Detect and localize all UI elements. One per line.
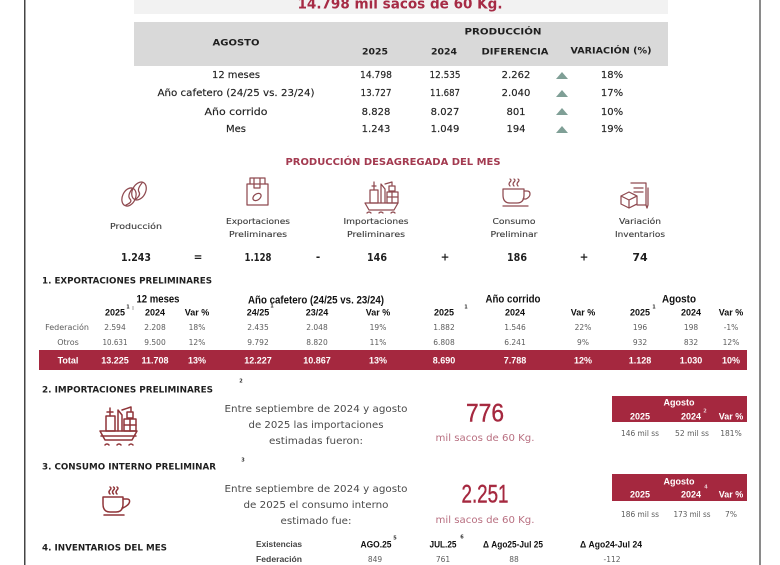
icon: coffee cup large [103,487,130,515]
callout: imports 776: 776 [466,400,504,428]
exports table: Var % [366,308,390,318]
consumption August table: 186 mil ss [621,510,659,519]
imports August table: 2025 [630,412,650,422]
breakdown equation: Variación [619,216,661,226]
production summary table: 801 [506,107,526,118]
breakdown equation: Exportaciones [226,217,290,226]
exports table: Año corrido [486,294,541,306]
exports table: Otros [57,338,79,347]
exports table: 12% [723,338,739,347]
exports table: 13.225 [101,356,129,366]
imports August table: 2024 [681,412,701,422]
production summary table: 2.040 [502,88,530,99]
exports table: 1 [464,305,468,311]
production summary table: 19% [601,124,623,135]
exports table: 8.820 [306,338,328,347]
breakdown equation: Consumo [492,217,536,226]
breakdown equation: Importaciones [344,217,408,226]
exports table: 7.788 [504,356,526,366]
breakdown equation: Inventarios [615,230,665,239]
production summary table: 194 [506,124,526,135]
exports table: 198 [684,323,698,332]
exports table: 1.128 [629,356,651,366]
exports table: 1 [270,304,274,310]
exports table: 1 [126,305,130,311]
heading: producción desagregada: PRODUCCIÓN DESAGREGADA DEL MES [286,156,501,168]
exports table: 2024 [145,308,165,318]
callout: consumption 2.251: 2.251 [462,481,508,509]
exports table: 2.435 [247,323,269,332]
exports table: Agosto [662,294,696,306]
consumption August table: 2025 [630,490,650,500]
exports table: Var % [185,308,209,318]
exports table: 22% [575,323,591,332]
inventory table [256,535,642,564]
exports table: 10% [722,356,740,366]
heading: exportaciones: 1. EXPORTACIONES PRELIMINARES [42,277,212,287]
production summary table: VARIACIÓN (%) [570,45,652,57]
exports table: 12% [574,356,592,366]
imports August table: 2 [703,409,707,415]
callout: imports 776 [436,400,534,444]
exports table: 10.867 [303,356,331,366]
exports table: 23/24 [306,308,328,318]
imports August table: 146 mil ss [621,429,659,438]
text: consumption description: de 2025 el consumo interno [244,500,388,511]
exports table: 11% [370,338,386,347]
heading: consumo: 3. CONSUMO INTERNO PRELIMINAR [42,463,216,473]
icon: cargo ship [365,182,398,213]
inventory table: 88 [509,555,519,564]
callout: consumption 2.251 [436,481,534,526]
breakdown equation: 1.243 [121,251,151,264]
breakdown equation: Preliminares [229,230,287,239]
heading: importaciones: 2. IMPORTACIONES PRELIMINARES [42,386,213,396]
exports table: 12.227 [244,356,272,366]
production summary table: 12.535 [430,70,460,81]
inventory table: Δ Ago24-Jul 24 [580,540,642,550]
callout: consumption 2.251: mil sacos de 60 Kg. [436,515,534,526]
exports table: 18% [189,323,205,332]
breakdown equation: Preliminar [490,230,538,239]
text: imports description: estimadas fueron: [269,436,363,447]
exports table: 9% [577,338,589,347]
breakdown equation: Producción [110,221,162,231]
breakdown equation: 74 [632,251,648,264]
exports table: 13% [188,356,206,366]
exports table: 1.882 [433,323,455,332]
icon: coffee bag [247,178,268,205]
text: imports description [224,379,408,447]
exports table: 12 meses [136,294,180,306]
exports table: 2025 [630,308,650,318]
callout: imports 776: mil sacos de 60 Kg. [436,433,534,444]
text: imports description: 2 [239,379,243,385]
production summary table: 2024 [431,48,457,58]
exports table: 1.030 [680,356,702,366]
exports table: 8.690 [433,356,455,366]
breakdown equation: 186 [507,251,527,264]
consumption August table [612,474,747,519]
heading: inventarios: 4. INVENTARIOS DEL MES [42,544,167,554]
exports table: 10.631 [102,338,128,347]
consumption August table: Agosto [664,477,695,487]
imports August table: Agosto [664,398,695,408]
exports table: 11.708 [141,356,169,366]
production summary table: 17% [601,88,623,99]
production summary table: 10% [601,107,623,118]
production summary table: 14.798 [360,70,392,81]
icon: cargo ship large [100,407,137,445]
consumption August table: 4 [704,485,708,491]
inventory table: AGO.25 [360,540,392,550]
inventory table: 849 [368,555,382,564]
exports table: 2.594 [104,323,126,332]
exports table: Var % [719,308,743,318]
production summary table: 1.243 [362,124,390,135]
exports table: 2024 [505,308,525,318]
consumption August table: 2024 [681,490,701,500]
breakdown equation: - [316,252,320,264]
production summary table: Mes [226,124,246,135]
exports table: 24/25 [247,308,269,318]
production summary table: 12 meses [212,70,260,81]
text: consumption description [224,458,408,527]
text: consumption description: 3 [241,458,245,464]
imports August table [612,396,747,438]
exports table: 2025 [434,308,454,318]
exports table: 6.241 [504,338,526,347]
breakdown equation: 146 [367,251,387,264]
text: consumption description: Entre septiembre de 2024 y agosto [224,484,408,495]
production summary table: 18% [601,70,623,81]
consumption August table: Var % [719,490,743,500]
inventory table: 761 [436,555,450,564]
imports August table: 52 mil ss [675,429,709,438]
consumption August table: 7% [725,510,737,519]
production summary table: PRODUCCIÓN [464,26,542,38]
icon: coffee cup [503,179,530,206]
icon: coffee beans [119,180,149,208]
imports August table: Var % [719,412,743,422]
exports table: 2024 [681,308,701,318]
breakdown equation [110,216,665,264]
exports table: -1% [724,323,738,332]
exports table: 2.048 [306,323,328,332]
production summary table: DIFERENCIA [482,48,549,58]
inventory table: -112 [603,555,621,564]
exports table: Año cafetero (24/25 vs. 23/24) [248,295,384,307]
exports table: 19% [370,323,386,332]
exports table [39,294,747,370]
exports table: 196 [633,323,647,332]
text: imports description: Entre septiembre de 2024 y agosto [224,404,408,415]
production summary table: 8.828 [362,107,390,118]
text: consumption description: estimado fue: [280,516,352,527]
exports table: : [132,306,134,312]
exports table: 2025 [105,308,125,318]
exports table: 1.546 [504,323,526,332]
inventory table: Existencias [256,540,303,549]
breakdown equation: Preliminares [347,230,405,239]
production summary table: 13.727 [360,88,392,99]
production summary table: AGOSTO [212,39,260,49]
exports table: 9.792 [247,338,269,347]
breakdown equation: + [441,252,449,264]
consumption August table: 173 mil ss [674,510,711,519]
exports table: 6.808 [433,338,455,347]
imports August table: 181% [720,429,742,438]
inventory table: Federación [256,555,302,564]
exports table: Var % [571,308,595,318]
exports table: 13% [369,356,387,366]
exports table: 9.500 [144,338,166,347]
exports table: Federación [45,322,89,332]
production summary table [134,22,668,135]
exports table: 12% [189,338,205,347]
exports table: 2.208 [144,323,166,332]
exports table: 832 [684,338,698,347]
exports table: 932 [633,338,647,347]
title band [134,0,668,14]
production summary table: 11.687 [430,88,460,99]
production summary table: 1.049 [431,124,459,135]
inventory table: 5 [393,536,397,542]
inventory table: 6 [460,535,464,541]
breakdown equation: 1.128 [244,251,272,264]
production summary table: 2.262 [502,70,530,81]
breakdown equation: + [580,252,588,264]
inventory table: JUL.25 [430,540,456,550]
exports table: 1 [652,305,656,311]
breakdown equation: = [194,252,202,264]
production summary table: 2025 [362,48,388,58]
inventory table: Δ Ago25-Jul 25 [483,540,543,550]
production summary table: Año corrido [204,107,268,118]
exports table: Total [58,356,78,366]
production summary table: Año cafetero (24/25 vs. 23/24) [158,88,315,99]
text: imports description: de 2025 las importaciones [248,420,384,431]
icon: inventory box and clipboard [621,183,648,208]
production summary table: 8.027 [431,107,459,118]
